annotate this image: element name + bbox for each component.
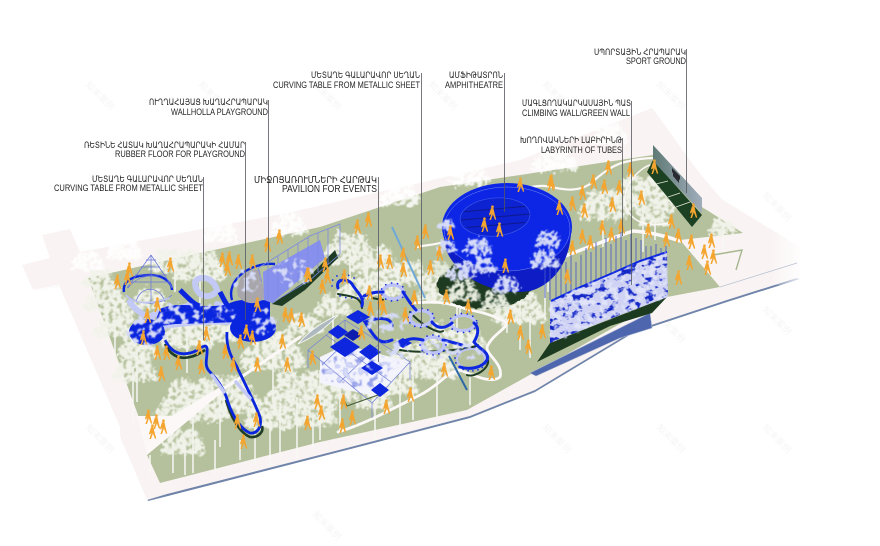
broad east path	[535, 231, 680, 268]
watermark grid: 知末案例	[311, 79, 344, 112]
watermark grid: 知末案例	[761, 190, 794, 223]
white footpaths	[137, 158, 680, 455]
foliage over playground	[128, 314, 172, 346]
foliage over amphitheatre	[436, 219, 563, 293]
label: curving table east	[273, 70, 420, 90]
watermark grid: 知末案例	[655, 312, 688, 345]
foundation shadow of amphitheatre	[437, 259, 533, 309]
wallholla playground	[124, 224, 340, 437]
upper path	[418, 158, 655, 247]
dome wire mesh	[126, 255, 173, 303]
grey panel	[237, 270, 265, 303]
curving table labyrinth	[332, 275, 488, 376]
watermark grid: 知末案例	[655, 422, 688, 455]
wallholla solid panel	[263, 240, 325, 303]
label: amphitheatre: ԱՄՖԻԹԱՏՐՈՆ	[449, 70, 503, 80]
label: amphitheatre: AMPHITHEATRE	[445, 80, 503, 90]
label: pavilion	[254, 175, 377, 195]
pavilion wireframe	[308, 320, 410, 418]
label: sport ground	[594, 47, 686, 66]
sport floor lines	[656, 181, 690, 207]
label: curving table west	[54, 174, 203, 193]
labyrinth rings	[383, 285, 403, 299]
tree canopy on pavement	[71, 122, 629, 271]
lavender dome rim	[126, 295, 170, 303]
label: curving table west: CURVING TABLE FROM METALLIC SHEET	[54, 183, 203, 193]
amphitheatre rim line	[444, 187, 570, 271]
watermark grid: 知末案例	[84, 79, 117, 112]
upper ring tube	[231, 264, 275, 300]
playground shadow	[165, 344, 262, 437]
watermark grid: 知末案例	[541, 79, 574, 112]
sport ground	[647, 145, 702, 227]
rear trees	[83, 175, 738, 455]
playground blue floor	[129, 290, 276, 345]
pavilion ground strut	[345, 395, 378, 406]
climbing wall tubes	[545, 232, 666, 300]
green lawn	[88, 155, 743, 483]
amphitheatre	[442, 183, 572, 292]
visitors	[114, 159, 717, 449]
watermark grid: 知末案例	[197, 79, 230, 112]
pavilion dark overlap	[344, 329, 362, 341]
wall shadow on ground	[537, 297, 667, 362]
label: labyrinth of tubes: ԽՈՂՈՎԱԿՆԵՐԻ ԼԱԲԻՐԻՆԹ	[520, 135, 622, 145]
sport wall	[653, 145, 702, 213]
label: rubber floor: RUBBER FLOOR FOR PLAYGROUND	[115, 149, 245, 159]
label: climbing wall: CLIMBING WALL/GREEN WALL	[522, 108, 630, 118]
amphitheatre cylinder	[442, 227, 571, 292]
wallholla wire frame	[258, 224, 340, 303]
tree trunks	[107, 197, 723, 475]
pavilion speckle	[322, 350, 395, 392]
label: labyrinth of tubes	[520, 135, 622, 155]
label: sport ground: ՍՊՈՐՏԱՅԻՆ ՀՐԱՊԱՐԱԿ	[594, 47, 686, 57]
ring path	[625, 165, 672, 225]
label: curving table west: ՄԵՏԱՂԵ ԳԱԼԱՐԱՎՈՐ ՍԵՂԱՆ	[92, 174, 203, 184]
sport floor	[647, 160, 702, 227]
pavement boundary line	[720, 263, 797, 287]
label: climbing wall: ՄԱԳԼՑՈՂԱԿԱՐԿԱՍԱՅԻՆ ՊԱՏ	[522, 98, 631, 108]
lavender pipe halo	[130, 278, 255, 326]
park site base: pink pavement	[22, 108, 806, 501]
wall top edge	[551, 252, 667, 301]
label: wallholla playground	[149, 97, 268, 117]
scoreboard	[672, 168, 680, 183]
winding path lower	[338, 302, 507, 432]
front foliage on structures	[128, 258, 484, 382]
grey leaf shaped strip	[298, 315, 338, 344]
pavilion blue roof panels	[328, 310, 412, 397]
label: curving table east: ՄԵՏԱՂԵ ԳԱԼԱՐԱՎՈՐ ՍԵՂԱՆ	[311, 70, 420, 80]
watermark grid: 知末案例	[311, 509, 344, 542]
amphitheatre top	[442, 183, 572, 271]
label: labyrinth of tubes: LABYRINTH OF TUBES	[541, 145, 622, 155]
wall foliage speckle	[550, 252, 668, 343]
tube to pond	[165, 332, 261, 433]
wide plaza wedge	[137, 384, 232, 455]
label: sport ground: SPORT GROUND	[626, 56, 686, 66]
foliage over tubes	[360, 312, 410, 332]
watermark grid: 知末案例	[655, 79, 688, 112]
labyrinth ring dots	[381, 283, 405, 301]
label: rubber floor	[84, 140, 245, 159]
wall face	[550, 252, 668, 343]
pole: inclined pole	[392, 227, 425, 298]
labyrinth tube	[338, 280, 488, 368]
watermark grid: 知末案例	[761, 422, 794, 455]
leader lines	[204, 49, 686, 362]
wallholla dark base	[272, 250, 338, 306]
watermark grid: 知末案例	[761, 304, 794, 337]
pavilion white floor	[320, 345, 410, 397]
label: climbing wall	[522, 98, 631, 118]
climbing wall / green wall	[530, 252, 668, 376]
label: wallholla playground: WALLHOLLA PLAYGROUND	[171, 107, 268, 117]
labyrinth shadow	[338, 294, 488, 376]
label: wallholla playground: ՈՒՂՂԱՀԱՅԱՑ ԽԱՂԱՀՐԱՊԱՐԱԿ	[149, 97, 268, 107]
pavilion for events	[308, 310, 412, 418]
label: amphitheatre	[445, 70, 503, 90]
small site marking	[713, 250, 742, 270]
watermark grid: 知末案例	[541, 422, 574, 455]
foliage over pavilion	[379, 340, 411, 370]
wall base mesh	[530, 313, 652, 376]
watermark grid: 知末案例	[84, 422, 117, 455]
lavender tube crossing	[212, 375, 250, 398]
pole: inclined pole lower	[449, 356, 467, 390]
amphitheatre inner opening	[458, 195, 532, 239]
watermark grid: 知末案例	[427, 79, 460, 112]
label: pavilion: ՄԻՋՈՑԱՌՈՒՄՆԵՐԻ ՀԱՐԹԱԿ	[254, 175, 377, 186]
dome base ring	[124, 275, 172, 292]
trees at amphitheatre base	[427, 262, 512, 312]
wall texture	[550, 252, 668, 343]
watermark grid	[84, 79, 794, 542]
label: pavilion: PAVILION FOR EVENTS	[282, 184, 377, 195]
label: curving table east: CURVING TABLE FROM METALLIC SHEET	[273, 80, 420, 90]
diagonal path	[228, 337, 300, 386]
label: rubber floor: ՌԵՏԻՆԵ ՀԱՏԱԿ ԽԱՂԱՀՐԱՊԱՐԱԿԻ ՀԱՄԱՐ	[84, 140, 245, 150]
